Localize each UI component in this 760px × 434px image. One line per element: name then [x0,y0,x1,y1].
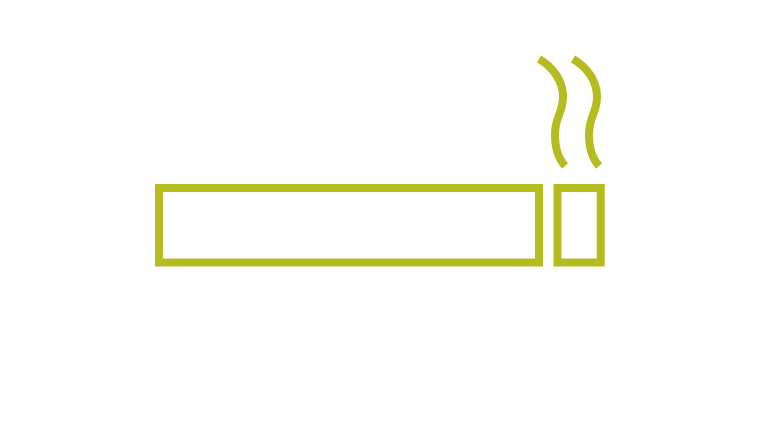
cigarette body [159,188,539,262]
smoke wisp: left [539,59,565,166]
smoke wisp: right [573,59,599,166]
cigarette filter [558,188,601,262]
